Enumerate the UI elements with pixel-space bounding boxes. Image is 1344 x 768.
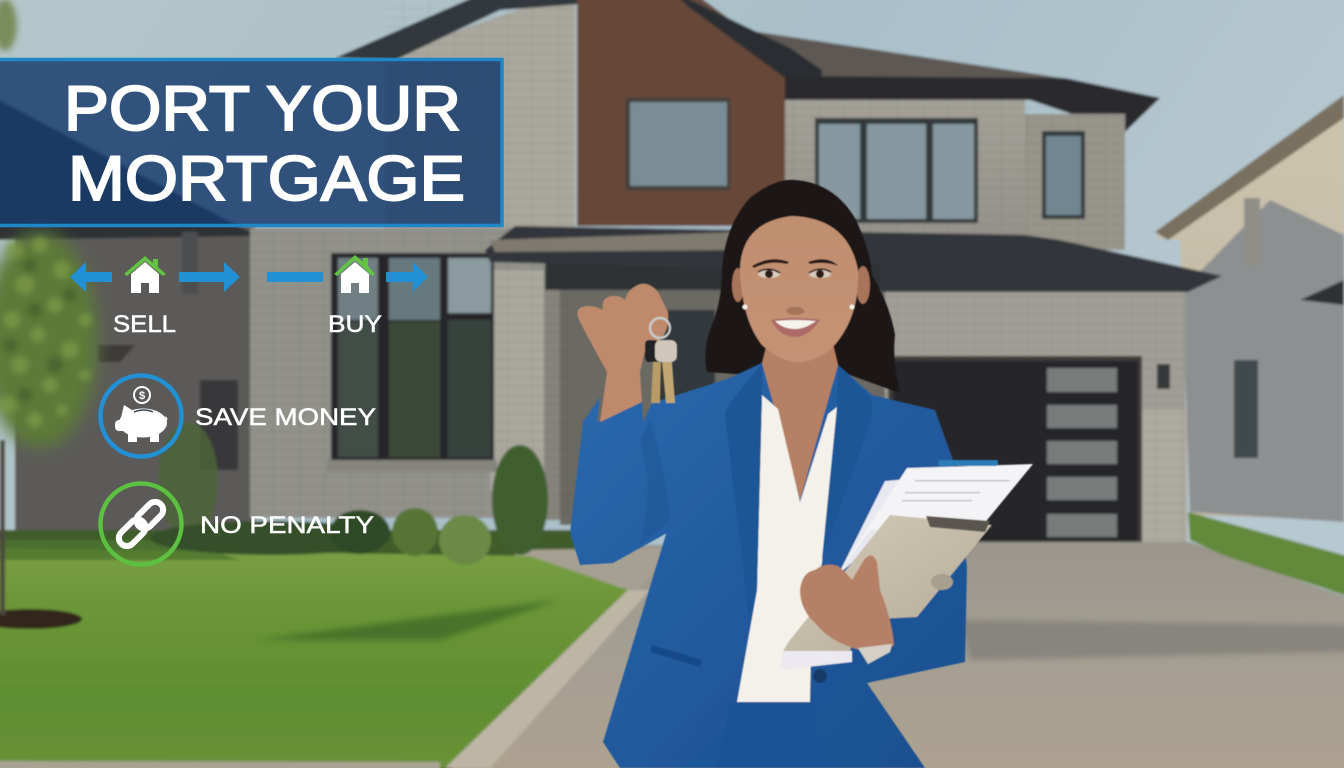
tablet	[783, 515, 992, 651]
hair	[705, 180, 900, 393]
neighbouring house right	[1155, 95, 1344, 522]
sell to buy flow	[70, 255, 428, 338]
blazer pocket	[650, 645, 702, 667]
raised hand	[577, 284, 668, 422]
wristwatch	[858, 644, 892, 664]
hand on tablet	[800, 555, 894, 653]
sky	[0, 0, 1344, 590]
neighbouring house left	[0, 95, 258, 546]
sleeve shading	[640, 420, 670, 545]
icon: buy house	[334, 255, 375, 293]
title text: MORTGAGE	[68, 144, 465, 214]
keys	[645, 318, 677, 403]
garage door	[888, 356, 1170, 542]
tree	[0, 0, 98, 615]
face	[732, 216, 870, 362]
blazer button	[813, 669, 827, 683]
no penalty label: NO PENALTY	[200, 512, 374, 539]
porch soffit	[545, 255, 890, 290]
blouse	[737, 395, 837, 702]
ground: walkway and driveway	[0, 512, 1344, 768]
save money label: SAVE MONEY	[195, 404, 376, 431]
benefit: no penalty	[100, 484, 374, 564]
main house upper storey	[335, 0, 1160, 250]
main house lower storey	[250, 228, 1187, 547]
papers	[780, 460, 1033, 670]
shrubs	[150, 422, 548, 565]
woman holding keys and documents	[570, 180, 1033, 768]
sell label: SELL	[113, 311, 176, 338]
arrow right	[179, 262, 240, 292]
lawn	[0, 540, 650, 768]
icon: chain link	[100, 484, 182, 564]
benefit: save money	[100, 376, 376, 456]
connector dash	[267, 272, 323, 282]
title text: PORT YOUR	[64, 74, 461, 144]
title text	[64, 74, 465, 214]
trousers	[717, 702, 823, 768]
icon: sell house	[124, 256, 166, 293]
lapels	[725, 363, 872, 628]
arrow left	[70, 262, 112, 292]
title banner	[0, 60, 502, 226]
neck and chest	[762, 340, 838, 505]
icon: piggy bank: $	[139, 390, 145, 402]
arrow right to buy	[386, 262, 428, 292]
blazer	[570, 363, 967, 768]
icon: piggy bank	[100, 376, 182, 456]
porch roof	[485, 226, 1222, 292]
buy label: BUY	[328, 311, 382, 338]
